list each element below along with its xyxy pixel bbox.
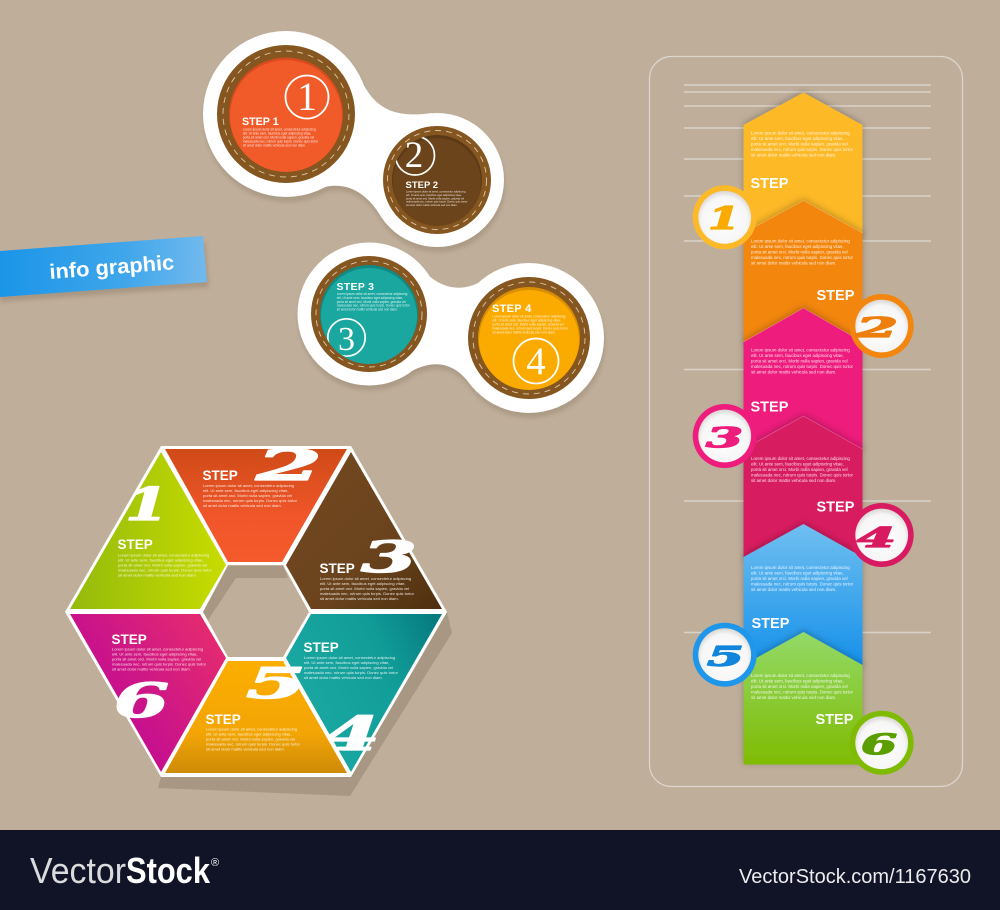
arrow 5 [744, 524, 862, 668]
segment 5: malesuada nec, rutrum quis turpis. Donec quis tortor [206, 742, 301, 746]
arrow 2: malesuada nec, rutrum quis turpis. Donec quis tortor [751, 255, 854, 260]
segment 4: Lorem ipsum dolor sit amet, consectetur adipiscing [304, 655, 395, 660]
segment 1: porta sit amet orci. Morbi nulla sapien, gravida vel [118, 562, 207, 568]
arrow 3: STEP [750, 400, 789, 416]
arrow 3: Lorem ipsum dolor sit amet, consectetur adipiscing [751, 348, 850, 353]
arrow 5: porta sit amet orci. Morbi nulla sapien, gravida vel [751, 576, 848, 581]
segment 6 [70, 614, 226, 772]
segment 3: elit. Ut ante sem, faucibus eget adipiscing vitae, [320, 581, 405, 586]
step 3 circle: Lorem ipsum dolor sit amet, consectetur adipiscing [337, 292, 408, 296]
step 2 circle: sit amet dolor mattis vehicula sed non diam. [406, 203, 458, 207]
segment 6: elit. Ut ante sem, faucibus eget adipiscing vitae, [112, 652, 197, 656]
step 2 circle: 2 [405, 135, 423, 176]
arrow 2 [744, 200, 862, 345]
segment 2: STEP [202, 468, 238, 483]
segment 6: STEP [112, 632, 147, 647]
arrow 6: porta sit amet orci. Morbi nulla sapien, gravida vel [751, 684, 848, 689]
segment 3: 3 [361, 533, 417, 583]
segment 1: Lorem ipsum dolor sit amet, consectetur adipiscing [118, 552, 209, 558]
step 4 circle: elit. Ut ante sem, faucibus eget adipiscing vitae, [492, 319, 561, 323]
segment 5: Lorem ipsum dolor sit amet, consectetur adipiscing [206, 726, 297, 732]
segment 4: sit amet dolor mattis vehicula sed non diam. [304, 675, 383, 680]
arrow 4: sit amet dolor mattis vehicula sed non diam. [751, 478, 836, 483]
step 4 circle: sit amet dolor mattis vehicula sed non diam. [492, 331, 556, 335]
step 1 circle: 1 [297, 74, 317, 119]
step 1 circle: STEP 1 [242, 116, 279, 128]
segment 5: porta sit amet orci. Morbi nulla sapien, gravida vel [206, 736, 295, 742]
step 4 circle: porta sit amet orci. Morbi nulla sapien, gravida vel [492, 323, 564, 327]
ribbon: info graphic [0, 236, 209, 302]
arrow 1: malesuada nec, rutrum quis turpis. Donec quis tortor [751, 147, 854, 152]
segment 3: sit amet dolor mattis vehicula sed non diam. [320, 596, 399, 601]
segment 4: elit. Ut ante sem, faucibus eget adipiscing vitae, [304, 660, 389, 665]
segment 2: Lorem ipsum dolor sit amet, consectetur adipiscing [203, 483, 294, 488]
arrow 4: elit. Ut ante sem, faucibus eget adipiscing vitae, [751, 462, 844, 466]
segment 6: malesuada nec, rutrum quis turpis. Donec quis tortor [112, 662, 207, 666]
badge 5 [693, 623, 757, 687]
badge 3 [693, 404, 757, 468]
footer logo [30, 850, 219, 891]
segment 6: Lorem ipsum dolor sit amet, consectetur adipiscing [112, 646, 203, 652]
segment 2 [165, 441, 347, 562]
segment 1: sit amet dolor mattis vehicula sed non diam. [118, 572, 197, 578]
arrow 1: sit amet dolor mattis vehicula sed non diam. [751, 152, 836, 158]
arrow 1: elit. Ut ante sem, faucibus eget adipiscing vitae, [751, 136, 844, 141]
step 2 circle: malesuada nec, rutrum quis turpis. Donec quis tortor [406, 200, 467, 204]
step 2 circle: Lorem ipsum dolor sit amet, consectetur adipiscing [406, 190, 466, 194]
panel: circle steps 3 and 4 [298, 242, 605, 418]
step 1 circle: elit. Ut ante sem, faucibus eget adipiscing vitae, [243, 132, 311, 136]
badge 4: 4 [857, 523, 896, 554]
arrow 5: Lorem ipsum dolor sit amet, consectetur adipiscing [751, 565, 850, 570]
step 4 circle: STEP 4 [492, 303, 532, 315]
arrow 6: sit amet dolor mattis vehicula sed non diam. [751, 695, 836, 700]
segment 4 [286, 614, 442, 772]
segment 5 [165, 659, 347, 773]
step 2 circle: elit. Ut ante sem, faucibus eget adipiscing vitae, [406, 193, 462, 197]
arrow 3: sit amet dolor mattis vehicula sed non diam. [751, 370, 836, 375]
segment 1: 1 [125, 478, 169, 531]
arrow 1: STEP [750, 176, 789, 192]
segment 5: sit amet dolor mattis vehicula sed non diam. [206, 746, 285, 752]
footer bar [0, 830, 1000, 910]
arrow 3: elit. Ut ante sem, faucibus eget adipiscing vitae, [751, 353, 844, 358]
segment 1: malesuada nec, rutrum quis turpis. Donec quis tortor [118, 568, 213, 572]
arrow 4: Lorem ipsum dolor sit amet, consectetur adipiscing [751, 456, 850, 461]
segment 5: elit. Ut ante sem, faucibus eget adipiscing vitae, [206, 732, 291, 736]
arrow 5: STEP [752, 616, 790, 632]
arrow 6: STEP [816, 712, 854, 728]
step 1 circle: sit amet dolor mattis vehicula sed non diam. [243, 144, 306, 148]
arrow 2: STEP [816, 288, 855, 304]
footer image id: VectorStock.com/1167630 [739, 865, 971, 888]
badge 6: 6 [861, 728, 897, 761]
badge 1 [693, 185, 757, 249]
arrow 2: porta sit amet orci. Morbi nulla sapien, gravida vel [751, 250, 848, 255]
step 2 circle: porta sit amet orci. Morbi nulla sapien, gravida vel [406, 196, 465, 200]
segment 3: STEP [320, 561, 355, 576]
step 3 circle: porta sit amet orci. Morbi nulla sapien, gravida vel [337, 300, 406, 304]
segment 6: porta sit amet orci. Morbi nulla sapien, gravida vel [112, 656, 201, 662]
arrow 6 [744, 632, 862, 764]
segment 4: STEP [304, 640, 339, 655]
step 3 circle: elit. Ut ante sem, faucibus eget adipiscing vitae, [337, 296, 403, 300]
arrow 4: STEP [816, 500, 855, 516]
arrow 4 [744, 416, 862, 560]
panel: circle steps 1 and 2 [203, 31, 505, 252]
segment 1 [70, 452, 226, 609]
footer logo: Stock [126, 850, 211, 891]
panel: rounded frame with lines [650, 56, 962, 786]
panel: arrow steps [693, 92, 914, 775]
segment 3: Lorem ipsum dolor sit amet, consectetur adipiscing [320, 576, 411, 581]
step 3 circle: malesuada nec, rutrum quis turpis. Donec quis tortor [337, 304, 410, 308]
footer logo: ® [211, 857, 219, 869]
badge 2: 2 [854, 313, 898, 344]
segment 6: 6 [114, 674, 169, 729]
step 4 circle: 4 [526, 340, 546, 383]
arrow 6: elit. Ut ante sem, faucibus eget adipiscing vitae, [751, 678, 844, 684]
step 1 circle: malesuada nec, rutrum quis turpis. Donec quis tortor [243, 140, 319, 144]
step 1 circle [217, 45, 355, 183]
step 4 circle: Lorem ipsum dolor sit amet, consectetur adipiscing [492, 315, 566, 319]
arrow 1: Lorem ipsum dolor sit amet, consectetur adipiscing [751, 130, 850, 136]
arrow 4: porta sit amet orci. Morbi nulla sapien, gravida vel [751, 467, 848, 472]
arrow 6: malesuada nec, rutrum quis turpis. Donec quis tortor [751, 690, 854, 694]
badge 1: 1 [708, 201, 740, 237]
arrow 5: malesuada nec, rutrum quis turpis. Donec quis tortor [751, 582, 854, 586]
panel: hexagon [65, 441, 452, 796]
step 2 circle [383, 126, 491, 234]
arrow 2: Lorem ipsum dolor sit amet, consectetur adipiscing [751, 239, 850, 244]
segment 2: 2 [254, 441, 322, 490]
badge 3: 3 [706, 423, 743, 454]
badge 5: 5 [707, 642, 744, 673]
arrow 1: porta sit amet orci. Morbi nulla sapien, gravida vel [751, 142, 848, 146]
segment 2: porta sit amet orci. Morbi nulla sapien, gravida vel [203, 493, 292, 498]
arrow 5: sit amet dolor mattis vehicula sed non diam. [751, 587, 836, 592]
arrow 6: Lorem ipsum dolor sit amet, consectetur adipiscing [751, 673, 850, 678]
step 1 circle: porta sit amet orci. Morbi nulla sapien, gravida vel [243, 136, 315, 140]
segment 3: malesuada nec, rutrum quis turpis. Donec quis tortor [320, 591, 415, 596]
segment 4: 4 [324, 707, 380, 762]
step 4 circle: malesuada nec, rutrum quis turpis. Donec quis tortor [492, 327, 569, 331]
arrow 2: sit amet dolor mattis vehicula sed non diam. [751, 261, 836, 266]
step 3 circle: 3 [338, 321, 355, 358]
step 3 circle: sit amet dolor mattis vehicula sed non diam. [337, 308, 398, 312]
arrow 3: malesuada nec, rutrum quis turpis. Donec quis tortor [751, 364, 854, 369]
segment 2: sit amet dolor mattis vehicula sed non diam. [203, 503, 282, 508]
footer logo: Vector [30, 850, 126, 891]
step 3 circle [311, 256, 427, 372]
ribbon: info graphic: info graphic [49, 251, 175, 284]
segment 2: elit. Ut ante sem, faucibus eget adipiscing vitae, [203, 488, 288, 493]
segment 1: STEP [118, 537, 153, 552]
arrow 3: porta sit amet orci. Morbi nulla sapien, gravida vel [751, 359, 848, 364]
segment 5: STEP [206, 712, 241, 727]
arrow 4: malesuada nec, rutrum quis turpis. Donec quis tortor [751, 472, 854, 478]
step 3 circle: STEP 3 [336, 281, 374, 293]
segment 5: 5 [246, 659, 306, 708]
step 4 circle [468, 277, 590, 399]
segment 6: sit amet dolor mattis vehicula sed non diam. [112, 666, 191, 672]
segment 1: elit. Ut ante sem, faucibus eget adipiscing vitae, [118, 558, 203, 562]
arrow 5: elit. Ut ante sem, faucibus eget adipiscing vitae, [751, 570, 844, 576]
arrow 2: elit. Ut ante sem, faucibus eget adipiscing vitae, [751, 244, 844, 249]
arrow 3 [744, 308, 862, 452]
badge 2 [850, 294, 914, 358]
segment 2: malesuada nec, rutrum quis turpis. Donec quis tortor [203, 498, 298, 503]
step 2 circle: STEP 2 [406, 180, 438, 191]
step 1 circle: Lorem ipsum dolor sit amet, consectetur adipiscing [243, 128, 316, 132]
badge 6 [850, 711, 914, 775]
segment 3 [286, 452, 442, 609]
arrow 1 [744, 92, 862, 240]
segment 3: porta sit amet orci. Morbi nulla sapien, gravida vel [320, 586, 409, 591]
segment 4: porta sit amet orci. Morbi nulla sapien, gravida vel [304, 665, 393, 670]
badge 4 [850, 503, 914, 567]
segment 4: malesuada nec, rutrum quis turpis. Donec quis tortor [304, 670, 399, 675]
